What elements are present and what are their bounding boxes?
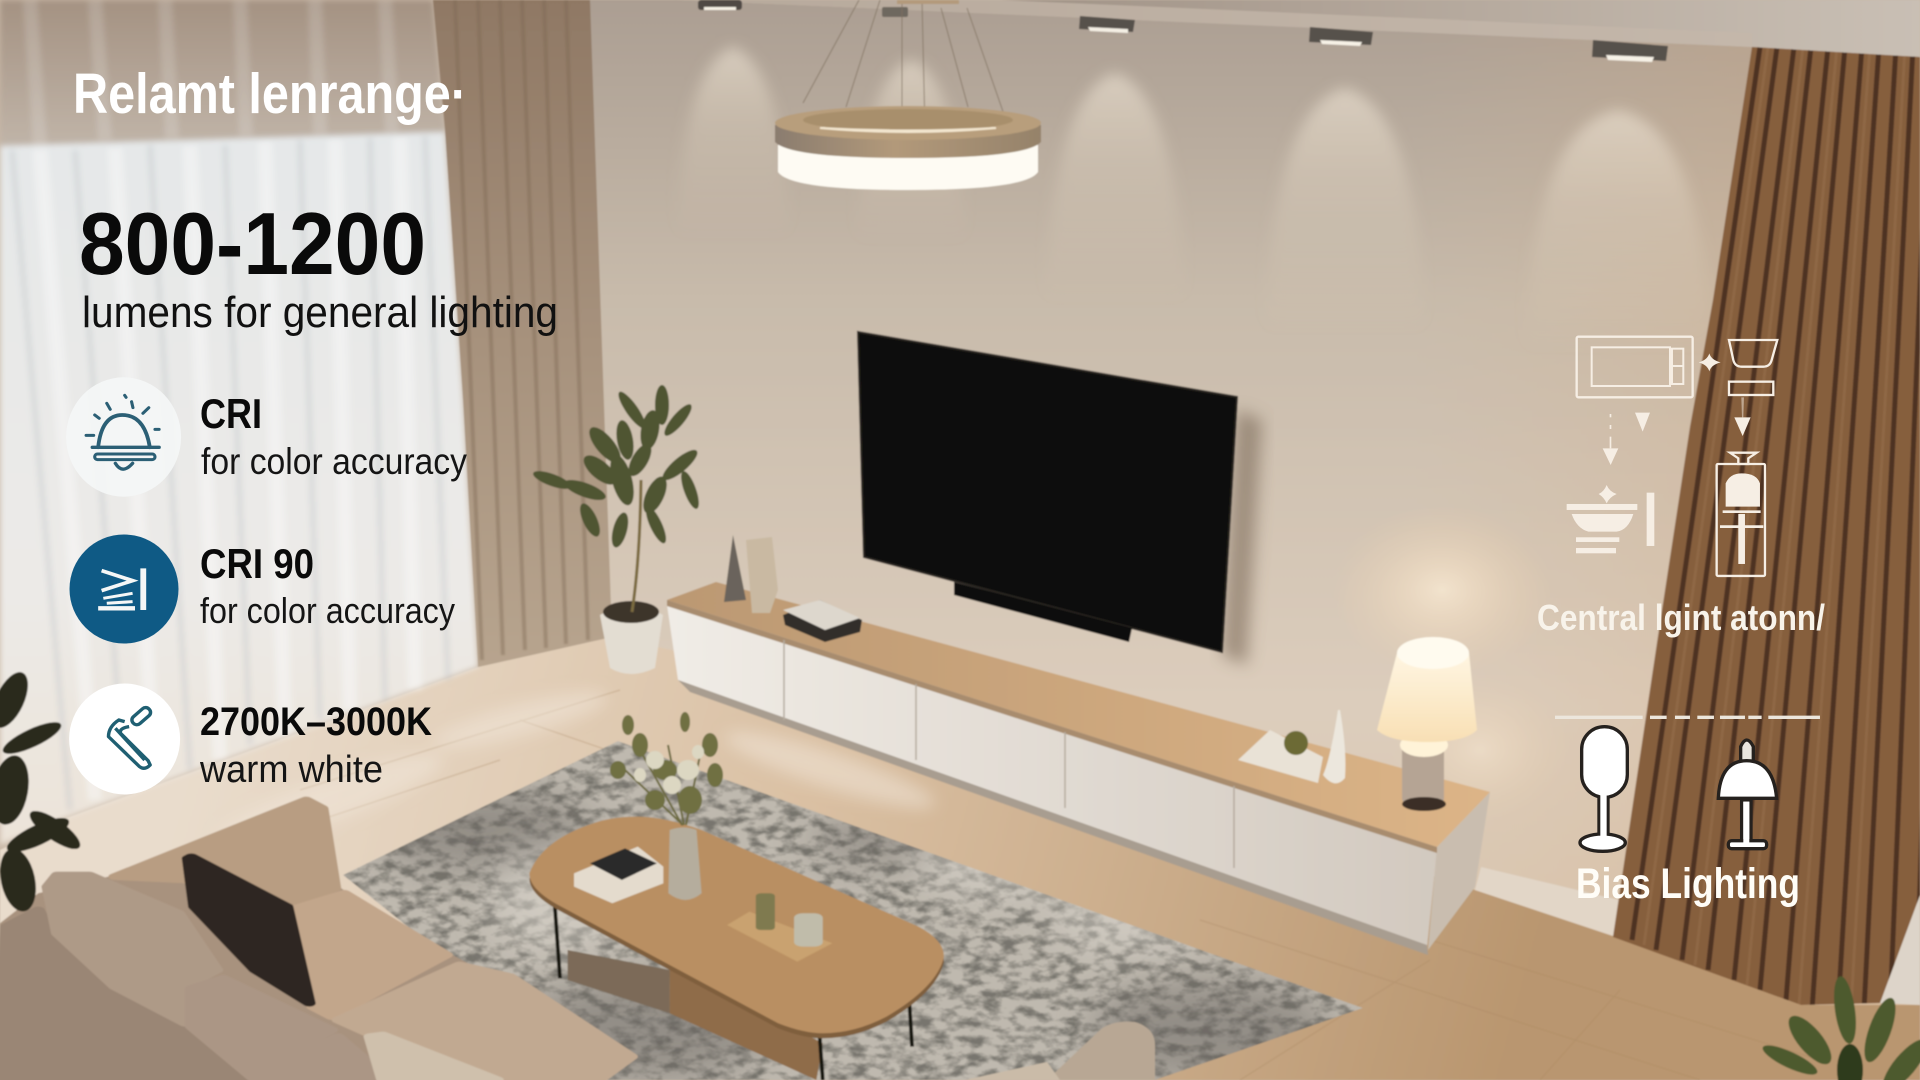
label: 2700K–3000K xyxy=(200,700,432,744)
wall xyxy=(560,0,1920,1010)
description: for color accuracy xyxy=(200,590,455,631)
TV cabinet xyxy=(667,582,1490,955)
label: CRI xyxy=(200,390,262,437)
wall right of wood panel xyxy=(1880,895,1920,1005)
sofa and coffee table xyxy=(0,797,944,1080)
central lighting label: Central lgint atonn/ xyxy=(1537,597,1825,638)
arrows xyxy=(1603,397,1751,465)
bias lighting label: Bias Lighting xyxy=(1576,860,1800,908)
headline stat: 800-1200: 800-1200 xyxy=(79,194,426,293)
curtain: sheer xyxy=(0,0,478,845)
item: CRI xyxy=(66,377,262,497)
TV shadow xyxy=(1222,410,1262,665)
icon: framed pendant xyxy=(1717,453,1765,576)
rug xyxy=(343,741,1363,1080)
sofa xyxy=(0,797,638,1080)
armchair corner xyxy=(965,1022,1155,1080)
icon: light fixture xyxy=(69,684,180,794)
ceiling light fixtures xyxy=(698,0,1668,62)
icon: ceiling panel xyxy=(1577,337,1693,397)
coffee table xyxy=(529,817,944,1080)
cabinet decor right xyxy=(1238,710,1345,783)
curtain: brown drape xyxy=(433,0,612,667)
item: colour temperature xyxy=(69,684,432,794)
central lighting icons xyxy=(1567,337,1777,576)
icon: table lamp left xyxy=(1580,727,1627,851)
soundbar xyxy=(954,582,1132,642)
bias lighting icons xyxy=(1555,717,1820,851)
pendant light xyxy=(775,0,1041,190)
icon: table lamp right xyxy=(1718,740,1777,849)
icon: sparkle connector xyxy=(1699,353,1721,371)
icon: cup fixture xyxy=(1729,340,1777,395)
television xyxy=(858,332,1237,652)
description: for color accuracy xyxy=(201,441,467,482)
stat caption: lumens for general lighting xyxy=(82,288,558,337)
wall spotlights xyxy=(678,47,1710,350)
icon: bowl fixture xyxy=(1567,485,1654,553)
lamp glow on wall xyxy=(1332,505,1552,675)
title: Relamt lenrange· xyxy=(73,62,467,126)
floor xyxy=(0,637,1920,1080)
ceiling xyxy=(673,0,1920,57)
icon: greater-or-equal xyxy=(70,534,178,644)
item: CRI 90 xyxy=(70,534,314,644)
label: CRI 90 xyxy=(200,540,314,587)
icon: bell light xyxy=(66,377,181,497)
potted plant xyxy=(531,385,702,674)
table lamp xyxy=(1377,637,1477,811)
flower bouquet xyxy=(610,712,723,825)
plant bottom right xyxy=(1759,975,1920,1080)
description: warm white xyxy=(199,749,383,791)
baseboard xyxy=(1475,867,1640,937)
plant bottom left xyxy=(0,667,85,915)
cabinet decor left xyxy=(724,535,862,642)
floor plank streaks xyxy=(200,690,1820,1080)
wood slat panel xyxy=(1600,40,1920,1010)
